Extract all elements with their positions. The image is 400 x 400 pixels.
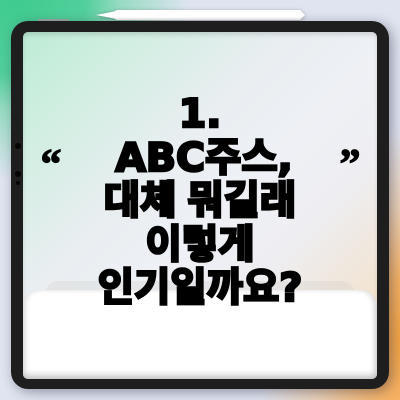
tablet screen <box>23 32 377 379</box>
camera dots on tablet edge <box>15 143 21 185</box>
heading: 1. <box>179 91 221 137</box>
back card <box>45 281 355 321</box>
heading: 대체 뭐길래 <box>104 178 296 224</box>
heading <box>98 91 302 311</box>
heading: 인기일까요? <box>98 265 302 311</box>
icon: stylus pencil <box>96 8 306 21</box>
opening quote mark: “ <box>40 142 62 188</box>
heading: ABC주스, <box>115 134 293 180</box>
closing quote mark: ” <box>340 142 360 188</box>
tablet side buttons <box>38 19 69 21</box>
heading: 이렇게 <box>145 222 255 268</box>
front white card <box>23 290 377 379</box>
